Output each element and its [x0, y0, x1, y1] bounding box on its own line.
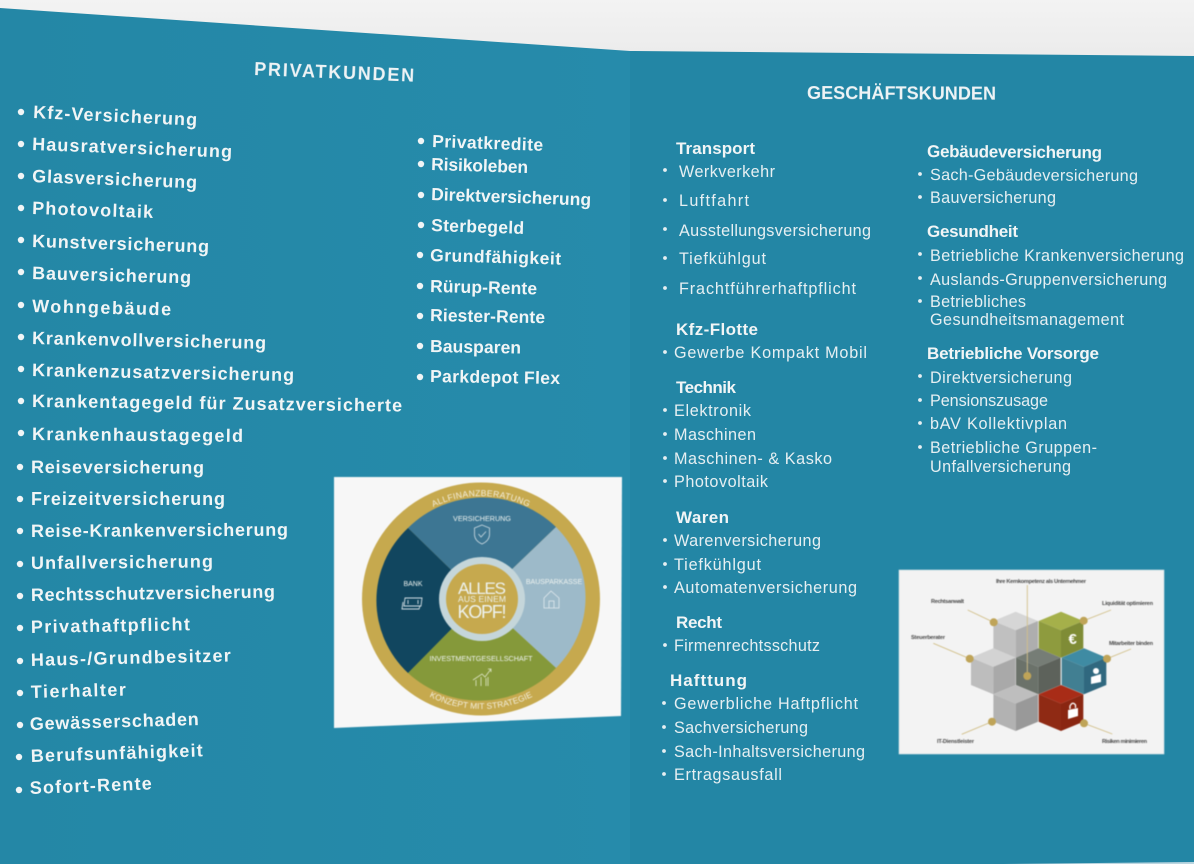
- group: Transport: [663, 139, 871, 298]
- item: Photovoltaik: Photovoltaik: [32, 198, 154, 222]
- group: Gesundheit: Gesundheitsmanagement: [930, 311, 1124, 329]
- center ring: [439, 557, 525, 641]
- icon: house: [544, 591, 559, 608]
- group: Gebäudeversicherung: Bauversicherung: [930, 189, 1056, 207]
- group: Gebäudeversicherung: [918, 142, 1138, 207]
- callout labels: Liquidität optimieren: [1102, 601, 1154, 607]
- segment: Bausparkasse: [481, 527, 586, 668]
- group: Technik: Elektronik: [674, 402, 752, 420]
- group: Hafttung: Hafttung: [670, 671, 747, 690]
- group: Transport: Luftfahrt: [679, 192, 750, 210]
- item: Freizeitversicherung: Freizeitversicherung: [31, 489, 225, 509]
- group: Gesundheit: Betriebliches: [930, 293, 1026, 311]
- item: Wohngebäude: Wohngebäude: [32, 296, 171, 319]
- callout labels: Steuerberater: [911, 635, 946, 641]
- group: Gesundheit: Gesundheit: [927, 222, 1018, 241]
- panel: Allfinanzberatung image: [333, 476, 623, 729]
- group: Hafttung: Gewerbliche Haftpflicht: [674, 695, 858, 713]
- item: Hausratversicherung: Hausratversicherung: [32, 134, 232, 162]
- group: Transport: Werkverkehr: [679, 163, 776, 181]
- cube: gray left: [971, 648, 1016, 694]
- group: Waren: [663, 508, 857, 597]
- item: Haus-/Grundbesitzer: Haus-/Grundbesitzer: [31, 645, 231, 670]
- group: Transport: Frachtführerhaftpflicht: [679, 280, 856, 298]
- item: Rürup-Rente: Rürup-Rente: [430, 276, 538, 298]
- cube: gray bottom: [993, 685, 1038, 731]
- label: Investmentgesellschaft: INVESTMENTGESELLSCHAFT: [429, 654, 533, 663]
- group: Gebäudeversicherung: Sach-Gebäudeversicherung: [930, 166, 1138, 185]
- callout labels: Risiken minimieren: [1102, 739, 1148, 745]
- label: Bank: BANK: [403, 581, 423, 588]
- item: Riester-Rente: Riester-Rente: [430, 305, 546, 327]
- cube: teal person: [1062, 648, 1106, 694]
- panel: left page: [0, 8, 630, 864]
- group: Kfz-Flotte: [663, 320, 867, 362]
- panel: Kernkompetenz cube diagram: [899, 570, 1164, 754]
- label: Versicherung: VERSICHERUNG: [453, 514, 511, 523]
- item: Sterbegeld: Sterbegeld: [431, 215, 524, 238]
- item: Sofort-Rente: Sofort-Rente: [29, 773, 152, 798]
- group: Hafttung: Sach-Inhaltsversicherung: [674, 743, 865, 761]
- center disc: [446, 564, 518, 634]
- segment: Bank: [376, 528, 481, 673]
- item: Reise-Krankenversicherung: Reise-Krankenversicherung: [31, 520, 288, 541]
- item: Grundfähigkeit: Grundfähigkeit: [430, 245, 562, 269]
- group: Recht: [663, 613, 820, 655]
- item: Parkdepot Flex: Parkdepot Flex: [430, 366, 561, 388]
- item: Bauversicherung: Bauversicherung: [32, 263, 191, 287]
- heading: Geschäftskunden: GESCHÄFTSKUNDEN: [807, 83, 996, 104]
- group: Technik: Maschinen: [674, 426, 756, 444]
- center text: [458, 579, 506, 622]
- label: Bausparkasse: BAUSPARKASSE: [526, 579, 582, 586]
- list: Privatkunden right column: [417, 131, 591, 388]
- icon: banknotes: [402, 598, 422, 609]
- callout labels: Mitarbeiter binden: [1109, 641, 1154, 647]
- item: Reiseversicherung: Reiseversicherung: [31, 457, 204, 478]
- group: Waren: Warenversicherung: [674, 532, 821, 550]
- group: Technik: [663, 378, 832, 491]
- item: Glasversicherung: Glasversicherung: [32, 166, 197, 192]
- group: Hafttung: [662, 671, 865, 784]
- list: Geschäftskunden left column: [662, 139, 871, 784]
- group: Waren: Tiefkühlgut: [674, 556, 762, 574]
- group: Hafttung: Sachversicherung: [674, 719, 808, 737]
- group: Technik: Technik: [676, 378, 737, 397]
- group: Transport: Ausstellungsversicherung: [679, 222, 871, 240]
- item: Krankentagegeld: Krankentagegeld für Zusatzversicherte: [32, 391, 402, 416]
- group: Waren: Automatenversicherung: [674, 579, 857, 597]
- item: Risikoleben: Risikoleben: [431, 154, 528, 177]
- group: Waren: Waren: [676, 508, 729, 527]
- group: Gesundheit: Betriebliche Krankenversicherung: [930, 247, 1184, 265]
- callout dots: [966, 617, 1111, 727]
- group: Kfz-Flotte: Gewerbe Kompakt Mobil: [674, 344, 867, 362]
- group: Technik: Photovoltaik: [674, 473, 769, 491]
- callout labels: Ihre Kernkompetenz als Unternehmer: [996, 579, 1087, 585]
- group: Kfz-Flotte: Kfz-Flotte: [676, 320, 758, 339]
- list: Geschäftskunden right column: [918, 142, 1184, 476]
- segment: Versicherung: [408, 497, 556, 599]
- item: Kfz-Versicherung: Kfz-Versicherung: [33, 102, 198, 130]
- group: Betriebliche Vorsorge: Betriebliche Gruppen-: [930, 439, 1097, 457]
- item: Krankenzusatzversicherung: Krankenzusatzversicherung: [32, 360, 294, 385]
- ring label: Allfinanzberatung: ALLFINANZBERATUNG: [432, 489, 530, 508]
- item: Privathaftpflicht: Privathaftpflicht: [31, 614, 190, 637]
- group: Betriebliche Vorsorge: Pensionszusage: [930, 392, 1048, 410]
- heading: Privatkunden: PRIVATKUNDEN: [254, 59, 415, 86]
- cube: green euro: [1039, 612, 1083, 658]
- item: Direktversicherung: Direktversicherung: [431, 184, 591, 210]
- item: Kunstversicherung: Kunstversicherung: [32, 231, 209, 257]
- icon: rising chart: [473, 669, 491, 686]
- group: Recht: Recht: [676, 613, 722, 632]
- item: Krankenhaustagegeld: Krankenhaustagegeld: [32, 424, 243, 446]
- center text: AUS EINEM: [458, 594, 506, 604]
- panel: right page: [630, 51, 1194, 864]
- group: Betriebliche Vorsorge: Direktversicherung: [930, 369, 1072, 387]
- center text: KOPF!: [458, 602, 506, 622]
- group: Betriebliche Vorsorge: Unfallversicherung: [930, 458, 1071, 476]
- group: Hafttung: Ertragsausfall: [674, 766, 782, 784]
- group: Gesundheit: Auslands-Gruppenversicherung: [930, 271, 1167, 289]
- item: Gewässerschaden: Gewässerschaden: [30, 709, 199, 734]
- group: Recht: Firmenrechtsschutz: [674, 637, 820, 655]
- callout labels: IT-Dienstleister: [937, 739, 975, 745]
- center text: ALLES: [458, 579, 506, 598]
- gold ring with wheel: [362, 482, 600, 716]
- list: Privatkunden left column: [16, 102, 402, 798]
- group: Gesundheit: [918, 222, 1184, 329]
- item: Unfallversicherung: Unfallversicherung: [31, 551, 213, 573]
- cube: gray top: [993, 612, 1038, 658]
- segment: Investmentgesellschaft: [408, 599, 556, 701]
- item: Bausparen: Bausparen: [430, 336, 521, 358]
- group: Gebäudeversicherung: Gebäudeversicherung: [927, 142, 1102, 162]
- item: Krankenvollversicherung: Krankenvollversicherung: [32, 328, 266, 353]
- icon: shield: [474, 525, 490, 544]
- page background: [0, 0, 1194, 60]
- callout labels: Rechtsanwalt: [931, 599, 964, 605]
- group: Betriebliche Vorsorge: bAV Kollektivplan: [930, 415, 1067, 433]
- group: Transport: Transport: [676, 139, 755, 158]
- item: Privatkredite: Privatkredite: [432, 131, 544, 155]
- group: Technik: Maschinen- & Kasko: [674, 450, 832, 468]
- item: Tierhalter: Tierhalter: [31, 680, 126, 702]
- item: Berufsunfähigkeit: Berufsunfähigkeit: [30, 740, 203, 766]
- ring label: Konzept mit Strategie: KONZEPT MIT STRATEGIE: [430, 691, 533, 710]
- callout labels: [911, 579, 1154, 745]
- group: Transport: Tiefkühlgut: [679, 250, 766, 268]
- group: Betriebliche Vorsorge: Betriebliche Vorsorge: [927, 344, 1099, 363]
- callout lines: [933, 585, 1131, 734]
- cube: dark center: [1016, 648, 1061, 694]
- cube: green euro: €: [1069, 631, 1078, 648]
- group: Betriebliche Vorsorge: [918, 344, 1099, 476]
- item: Rechtsschutzversicherung: Rechtsschutzversicherung: [31, 582, 275, 605]
- cube: red lock: [1039, 685, 1083, 731]
